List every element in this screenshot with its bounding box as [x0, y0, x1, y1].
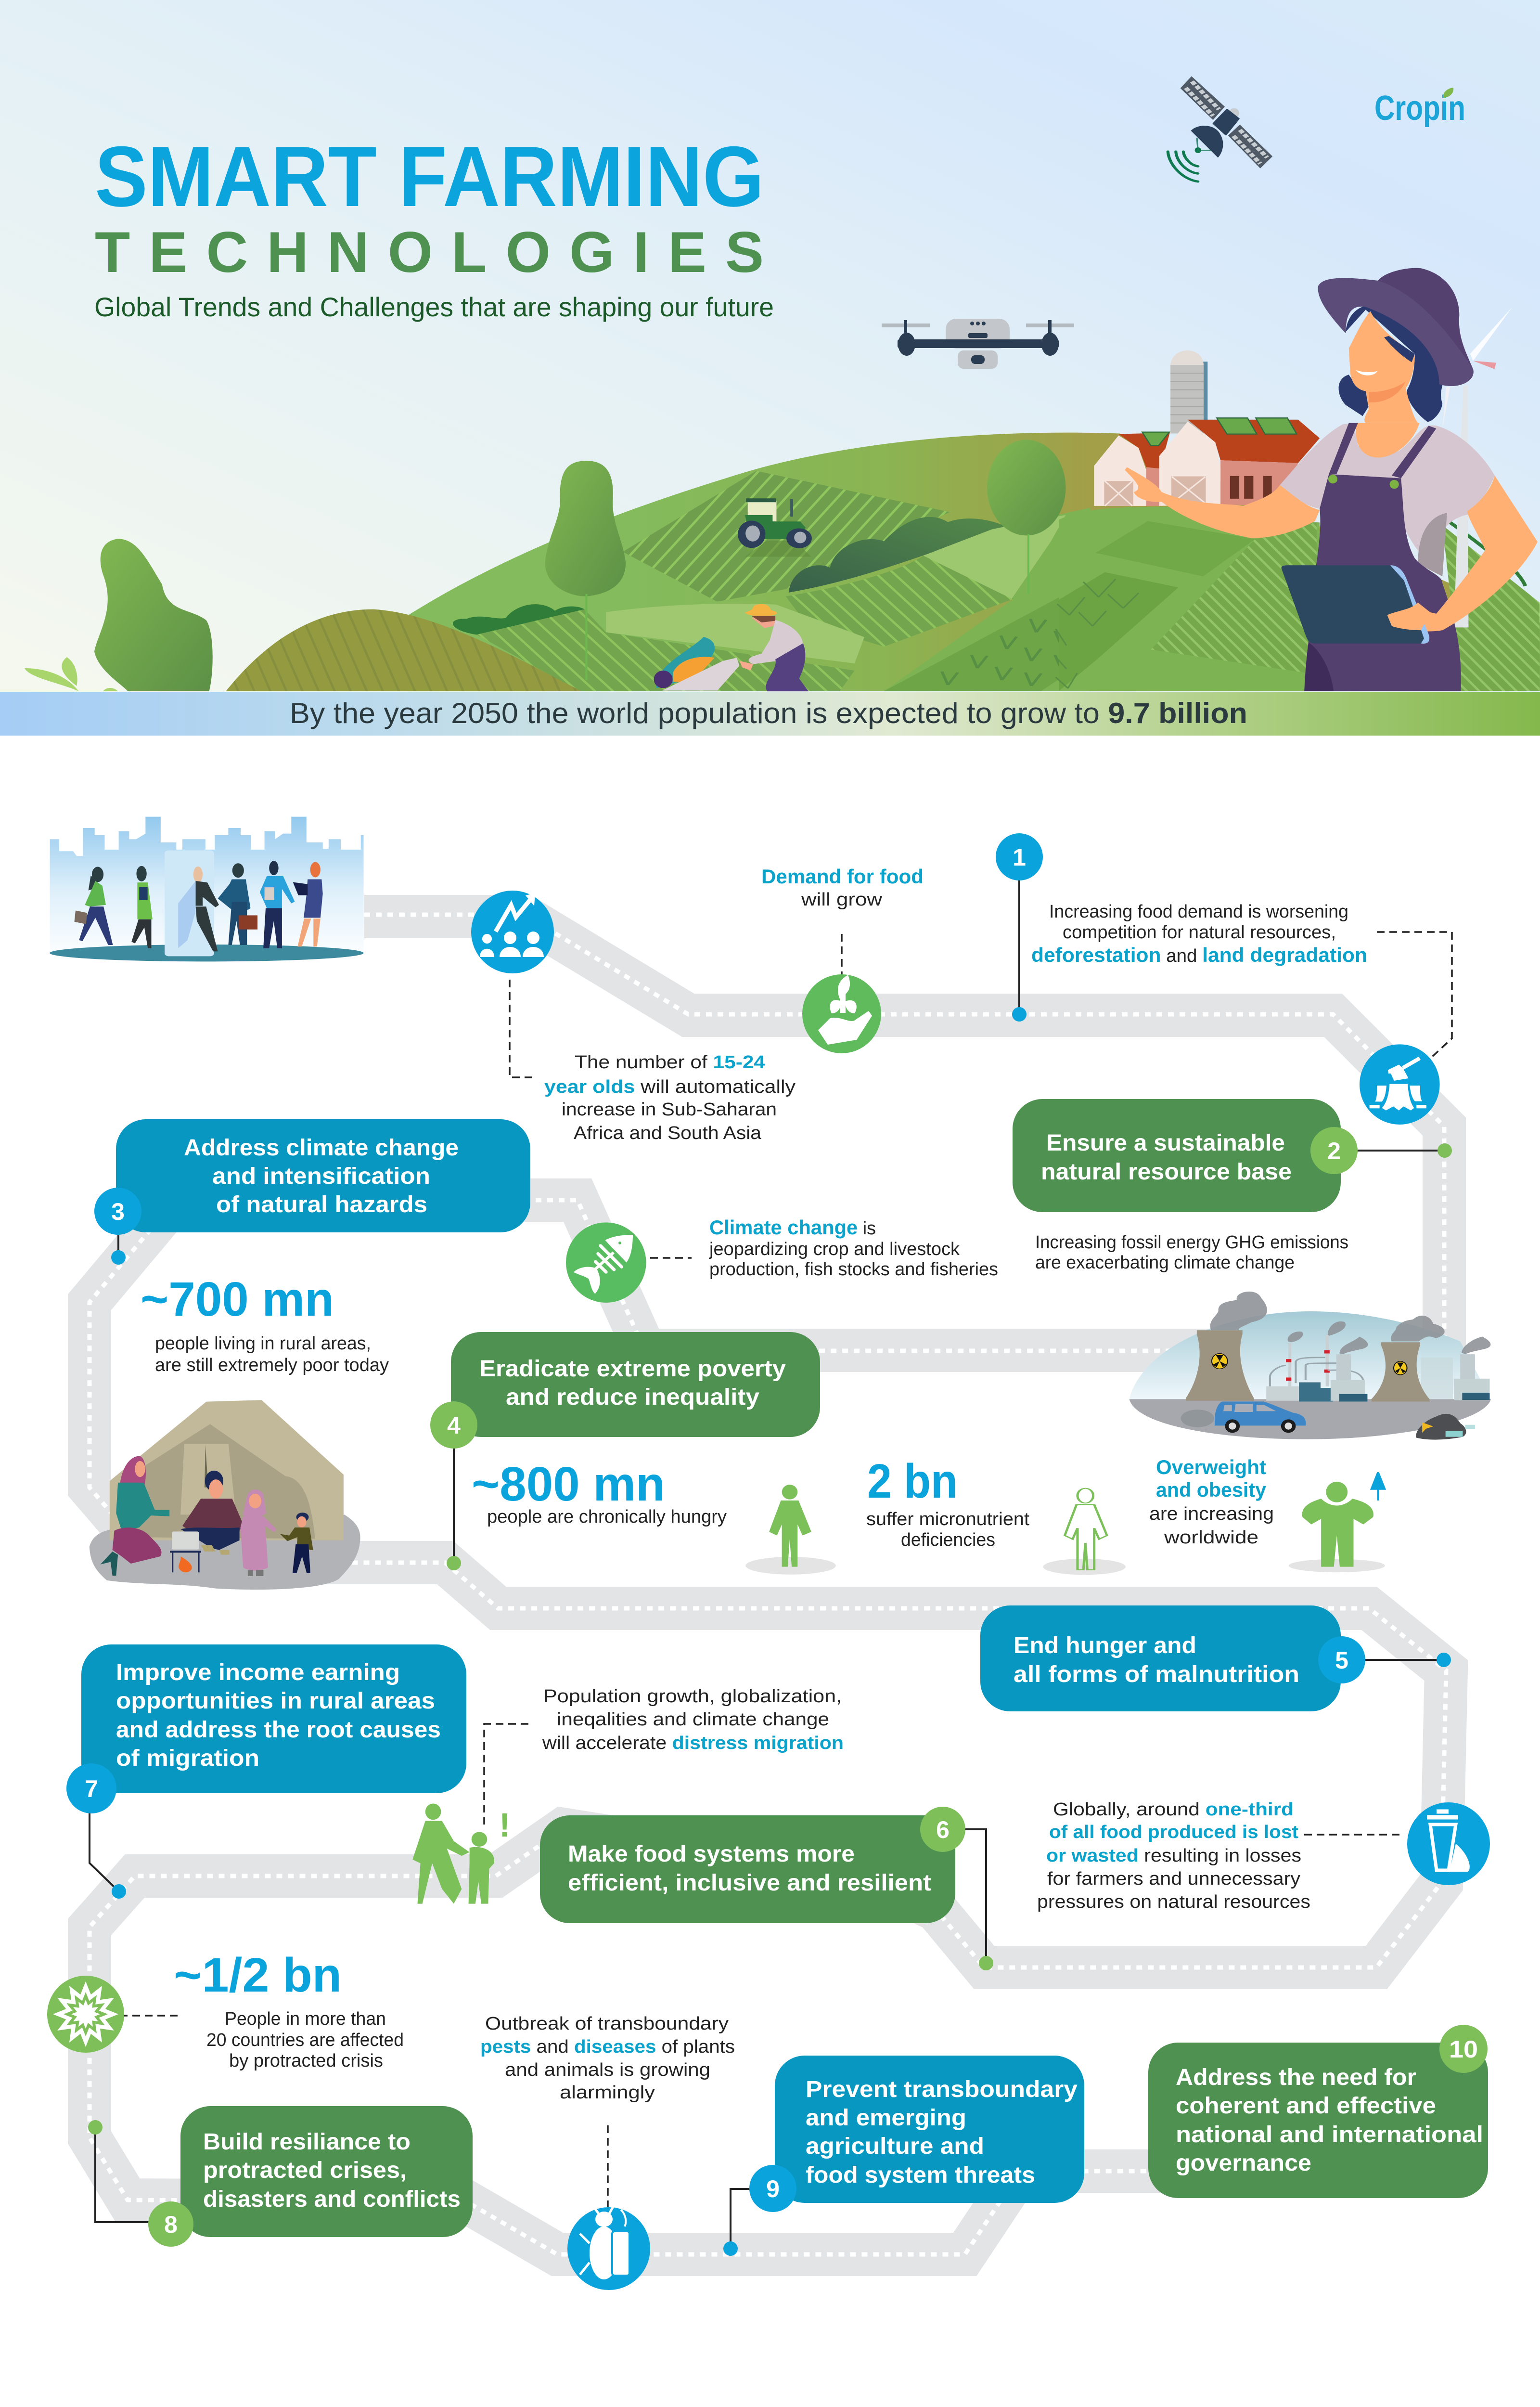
wind turbine	[1442, 307, 1513, 627]
lower left striped field	[476, 609, 855, 691]
dark hedge	[789, 517, 1007, 593]
text: demand for food: Demand for food	[761, 865, 924, 888]
icon: micronutrient deficient person	[1065, 1488, 1107, 1570]
olive hill	[226, 609, 581, 691]
text: distress migration	[542, 1686, 844, 1753]
badge 9	[749, 2165, 796, 2212]
panel: goal 3: and intensification	[212, 1164, 430, 1189]
text: fossil energy	[1035, 1232, 1348, 1273]
badge 10	[1439, 2025, 1488, 2073]
panel: goal 8: Build resiliance to	[203, 2129, 411, 2155]
barn and woman	[1054, 268, 1540, 691]
badge 10: 10	[1449, 2036, 1478, 2063]
winding road	[90, 915, 1446, 2254]
text: youth population: Africa and South Asia	[574, 1123, 762, 1143]
badge 1: 1	[1013, 844, 1026, 871]
panel: goal 10: coherent and effective	[1176, 2093, 1436, 2119]
panel: goal 2	[1013, 1099, 1341, 1212]
icon: tree stump	[1360, 1044, 1440, 1125]
badge 1	[996, 833, 1043, 880]
crop tufts	[1054, 579, 1139, 688]
text: demand for food	[761, 865, 924, 910]
title: SMART FARMING	[95, 129, 764, 224]
back hill	[408, 433, 1540, 691]
badge 8	[148, 2201, 193, 2247]
tree trunk	[585, 594, 588, 680]
hair	[1346, 306, 1444, 422]
panel: goal 2: natural resource base	[1041, 1159, 1292, 1185]
text: climate change: jeopardizing crop and livestock	[709, 1239, 960, 1259]
left hedge	[453, 604, 584, 634]
connector: goal 3	[111, 1232, 126, 1265]
stat: 2 billion: 2 bn	[867, 1454, 958, 1508]
stat: 700 million: are still extremely poor today	[155, 1355, 389, 1375]
icon: burst crisis	[47, 1976, 124, 2053]
text: fossil energy: Increasing fossil energy GHG emissions	[1035, 1232, 1348, 1253]
right tree	[987, 440, 1065, 535]
illustration: factories and pollution	[1129, 1292, 1491, 1440]
large foreground bush	[94, 539, 213, 691]
text: distress migration: will accelerate distress migration	[542, 1733, 844, 1753]
panel: goal 4	[451, 1332, 820, 1437]
text: climate change: Climate change is	[709, 1216, 876, 1239]
stat: 800 million: ~800 mn	[472, 1457, 665, 1511]
pale valley	[606, 604, 864, 663]
panel: goal 9: food system threats	[806, 2162, 1035, 2188]
badge 3	[94, 1188, 141, 1235]
face and neck	[1349, 311, 1418, 423]
badge 5	[1318, 1636, 1365, 1683]
shirt	[1280, 423, 1495, 576]
field patches	[1096, 521, 1255, 576]
pale terrace	[924, 515, 1065, 599]
panel: goal 6: Make food systems more	[568, 1841, 855, 1867]
badge 8: 8	[164, 2211, 178, 2238]
person 6	[293, 862, 323, 946]
panel: goal 5	[980, 1605, 1341, 1711]
panel: goal 7: opportunities in rural areas	[116, 1688, 435, 1714]
panel: goal 9	[775, 2056, 1084, 2203]
text: overweight: worldwide	[1164, 1527, 1258, 1548]
stat: half billion: by protracted crisis	[229, 2051, 383, 2071]
population banner	[0, 692, 1540, 736]
panel: goal 2: Ensure a sustainable	[1046, 1130, 1285, 1156]
stat: 700 million: people living in rural areas,	[155, 1333, 371, 1354]
person 2	[131, 866, 153, 948]
text: climate change: production, fish stocks and fisheries	[709, 1259, 998, 1280]
panel: goal 6: efficient, inclusive and resilient	[568, 1870, 931, 1896]
hat	[1346, 302, 1360, 318]
stat: half billion: People in more than	[225, 2009, 386, 2029]
exclamation mark: !	[499, 1806, 510, 1844]
illustration: refugee family at tent	[90, 1400, 360, 1590]
grass terrace	[1059, 507, 1320, 691]
icon: upward arrow	[1371, 1472, 1385, 1501]
connector: goal 5	[1365, 1653, 1451, 1667]
icon: drone	[882, 319, 1074, 369]
text: overweight: Overweight	[1156, 1456, 1266, 1478]
connector: goal 1	[1012, 879, 1027, 1022]
plant field	[884, 570, 1179, 691]
text: youth population: increase in Sub-Saharan	[562, 1100, 777, 1120]
icon: population growth	[471, 891, 554, 973]
tagline: Global Trends and Challenges that are shaping our future	[94, 292, 774, 322]
pot and stove	[170, 1531, 201, 1572]
man	[180, 1471, 243, 1555]
badge 2	[1310, 1127, 1358, 1174]
red roofs	[1118, 433, 1170, 468]
text: pests and diseases: and animals is growing	[505, 2060, 710, 2080]
stat: 700 million	[141, 1272, 389, 1375]
text: climate change	[709, 1216, 998, 1280]
icon: hand with plant	[802, 974, 881, 1053]
tractor	[738, 498, 812, 556]
connector: goal 2	[1357, 1143, 1452, 1158]
text: youth population	[544, 1052, 796, 1143]
solar panels	[1142, 418, 1296, 446]
badge 3: 3	[111, 1198, 125, 1225]
connector: goal 8	[88, 2120, 149, 2222]
text: fossil energy: are exacerbating climate change	[1035, 1253, 1295, 1273]
smile	[1356, 370, 1377, 375]
woman	[101, 1456, 169, 1576]
icon: overweight person	[1302, 1482, 1373, 1567]
connector: goal 4	[447, 1447, 461, 1570]
person 4	[218, 863, 257, 945]
panel: goal 8	[180, 2106, 473, 2237]
badge 7: 7	[85, 1775, 98, 1802]
badge 4: 4	[447, 1412, 461, 1439]
panel: goal 7: and address the root causes	[116, 1717, 441, 1743]
tractor field	[623, 471, 950, 602]
badge 5: 5	[1335, 1647, 1348, 1674]
turbine lower pole	[1454, 509, 1468, 627]
badge 2: 2	[1327, 1138, 1341, 1165]
stat: 800 million	[472, 1457, 727, 1527]
panel: goal 4: Eradicate extreme poverty	[479, 1356, 786, 1382]
panel: goal 4: and reduce inequality	[506, 1385, 759, 1410]
text: demand for food: will grow	[801, 890, 883, 910]
text: pests and diseases: pests and diseases of plants	[480, 2037, 735, 2057]
panel: goal 8: protracted crises,	[203, 2158, 407, 2183]
text: food waste: of all food produced is lost	[1049, 1822, 1298, 1842]
panel: goal 10: Address the need for	[1176, 2065, 1416, 2090]
panel: goal 10	[1148, 2043, 1488, 2198]
title	[94, 129, 774, 322]
text: distress migration: Population growth, globalization,	[543, 1686, 842, 1707]
text: youth population: The number of 15-24	[575, 1052, 765, 1073]
tablet	[1281, 565, 1426, 644]
stat: 2 billion: deficiencies	[901, 1530, 995, 1550]
connector: goal 6	[965, 1829, 993, 1970]
panel: goal 8: disasters and conflicts	[203, 2187, 461, 2212]
icon: satellite	[1168, 76, 1272, 181]
farmer with wheelbarrow	[654, 604, 808, 691]
text: food waste: pressures on natural resources	[1037, 1892, 1310, 1912]
panel: goal 9: Prevent transboundary	[806, 2077, 1078, 2102]
icon: bin and food waste	[1407, 1802, 1490, 1885]
figures: nutrition statistics	[745, 1472, 1385, 1575]
text: food demand and resources	[1031, 902, 1367, 966]
text: overweight: and obesity	[1156, 1478, 1267, 1501]
stat: 2 billion	[866, 1454, 1029, 1550]
badge 6: 6	[936, 1816, 950, 1843]
icon: pest on phone	[567, 2206, 650, 2290]
badge 7	[66, 1763, 116, 1813]
text: food waste	[1037, 1799, 1310, 1912]
panel: goal 3: of natural hazards	[216, 1192, 427, 1217]
badge 9: 9	[766, 2175, 780, 2202]
text: pests and diseases: alarmingly	[560, 2083, 655, 2103]
text: food demand and resources: deforestation and land degradation	[1031, 944, 1367, 966]
panel: goal 7: of migration	[116, 1746, 259, 1771]
text: overweight	[1149, 1456, 1274, 1548]
text: distress migration: ineqalities and climate change	[557, 1709, 829, 1730]
girl	[241, 1489, 276, 1576]
person 1	[75, 867, 113, 945]
dashed leader lines	[120, 932, 1452, 2207]
stat: half billion: ~1/2 bn	[174, 1948, 342, 2002]
population banner: By the year 2050 the world population is expected to grow to 9.7 billion	[290, 697, 1247, 729]
icon: hungry person	[769, 1485, 811, 1567]
text: pests and diseases	[480, 2014, 735, 2103]
person 5	[260, 861, 295, 948]
right tree trunk	[1027, 534, 1029, 594]
illustration: business people	[50, 817, 364, 961]
panel: goal 9: agriculture and	[806, 2134, 984, 2159]
tall tree	[545, 461, 626, 596]
icon: migrant family	[412, 1804, 494, 1904]
panel: goal 10: governance	[1176, 2150, 1311, 2176]
connector: goal 7	[90, 1812, 126, 1899]
arms	[1125, 467, 1320, 538]
panel: goal 3: Address climate change	[184, 1135, 459, 1161]
stat: half billion	[174, 1948, 404, 2071]
text: food waste: for farmers and unnecessary	[1047, 1869, 1300, 1889]
landscape illustration	[25, 433, 1540, 691]
trash pile	[1416, 1414, 1475, 1440]
stat: half billion: 20 countries are affected	[206, 2030, 404, 2050]
overalls	[1304, 474, 1461, 691]
panel: goal 7: Improve income earning	[116, 1660, 400, 1685]
text: overweight: are increasing	[1149, 1504, 1274, 1524]
middle striped field	[786, 556, 1014, 647]
badge 4	[430, 1401, 477, 1449]
header background	[0, 0, 1540, 692]
subtitle: technologies: TECHNOLOGIES	[95, 220, 764, 285]
crop tufts	[942, 581, 1136, 686]
stat: 2 billion: suffer micronutrient	[866, 1509, 1029, 1529]
woman	[1125, 268, 1538, 691]
icon: fish bone	[566, 1222, 646, 1303]
text: food demand and resources: Increasing food demand is worsening	[1049, 902, 1348, 922]
panel: goal 9: and emerging	[806, 2105, 966, 2131]
barn windows and doors	[1230, 476, 1272, 499]
silo	[1170, 350, 1207, 433]
panel: goal 7	[81, 1644, 466, 1793]
car	[1215, 1401, 1306, 1433]
text: food demand and resources: competition for natural resources,	[1063, 922, 1336, 943]
stat: 800 million: people are chronically hungry	[487, 1507, 727, 1527]
terrace ground	[884, 508, 1091, 691]
small leaves	[25, 657, 118, 691]
stat: 700 million: ~700 mn	[141, 1272, 334, 1326]
panel: goal 3	[116, 1119, 530, 1232]
barn walls	[1146, 460, 1298, 506]
badge 6	[920, 1807, 965, 1852]
logo: Cropin: Cropin	[1374, 89, 1465, 128]
figure shadows	[745, 1557, 836, 1575]
text: youth population: year olds will automatically	[544, 1077, 796, 1097]
connector: goal 9	[723, 2189, 751, 2256]
panel: goal 10: national and international	[1176, 2122, 1483, 2148]
text: pests and diseases: Outbreak of transboundary	[485, 2014, 729, 2034]
panel: goal 5: End hunger and	[1014, 1633, 1196, 1658]
smoke clouds	[1181, 1292, 1490, 1427]
person 3 with hand shake	[178, 867, 219, 951]
boy	[280, 1513, 313, 1573]
factory buildings	[1266, 1335, 1490, 1401]
text: food waste: or wasted resulting in losses	[1046, 1846, 1301, 1866]
panel: goal 6	[540, 1815, 955, 1923]
panel: goal 5: all forms of malnutrition	[1014, 1662, 1299, 1687]
text: food waste: Globally, around one-third	[1053, 1799, 1294, 1820]
cooling towers	[1186, 1330, 1430, 1401]
